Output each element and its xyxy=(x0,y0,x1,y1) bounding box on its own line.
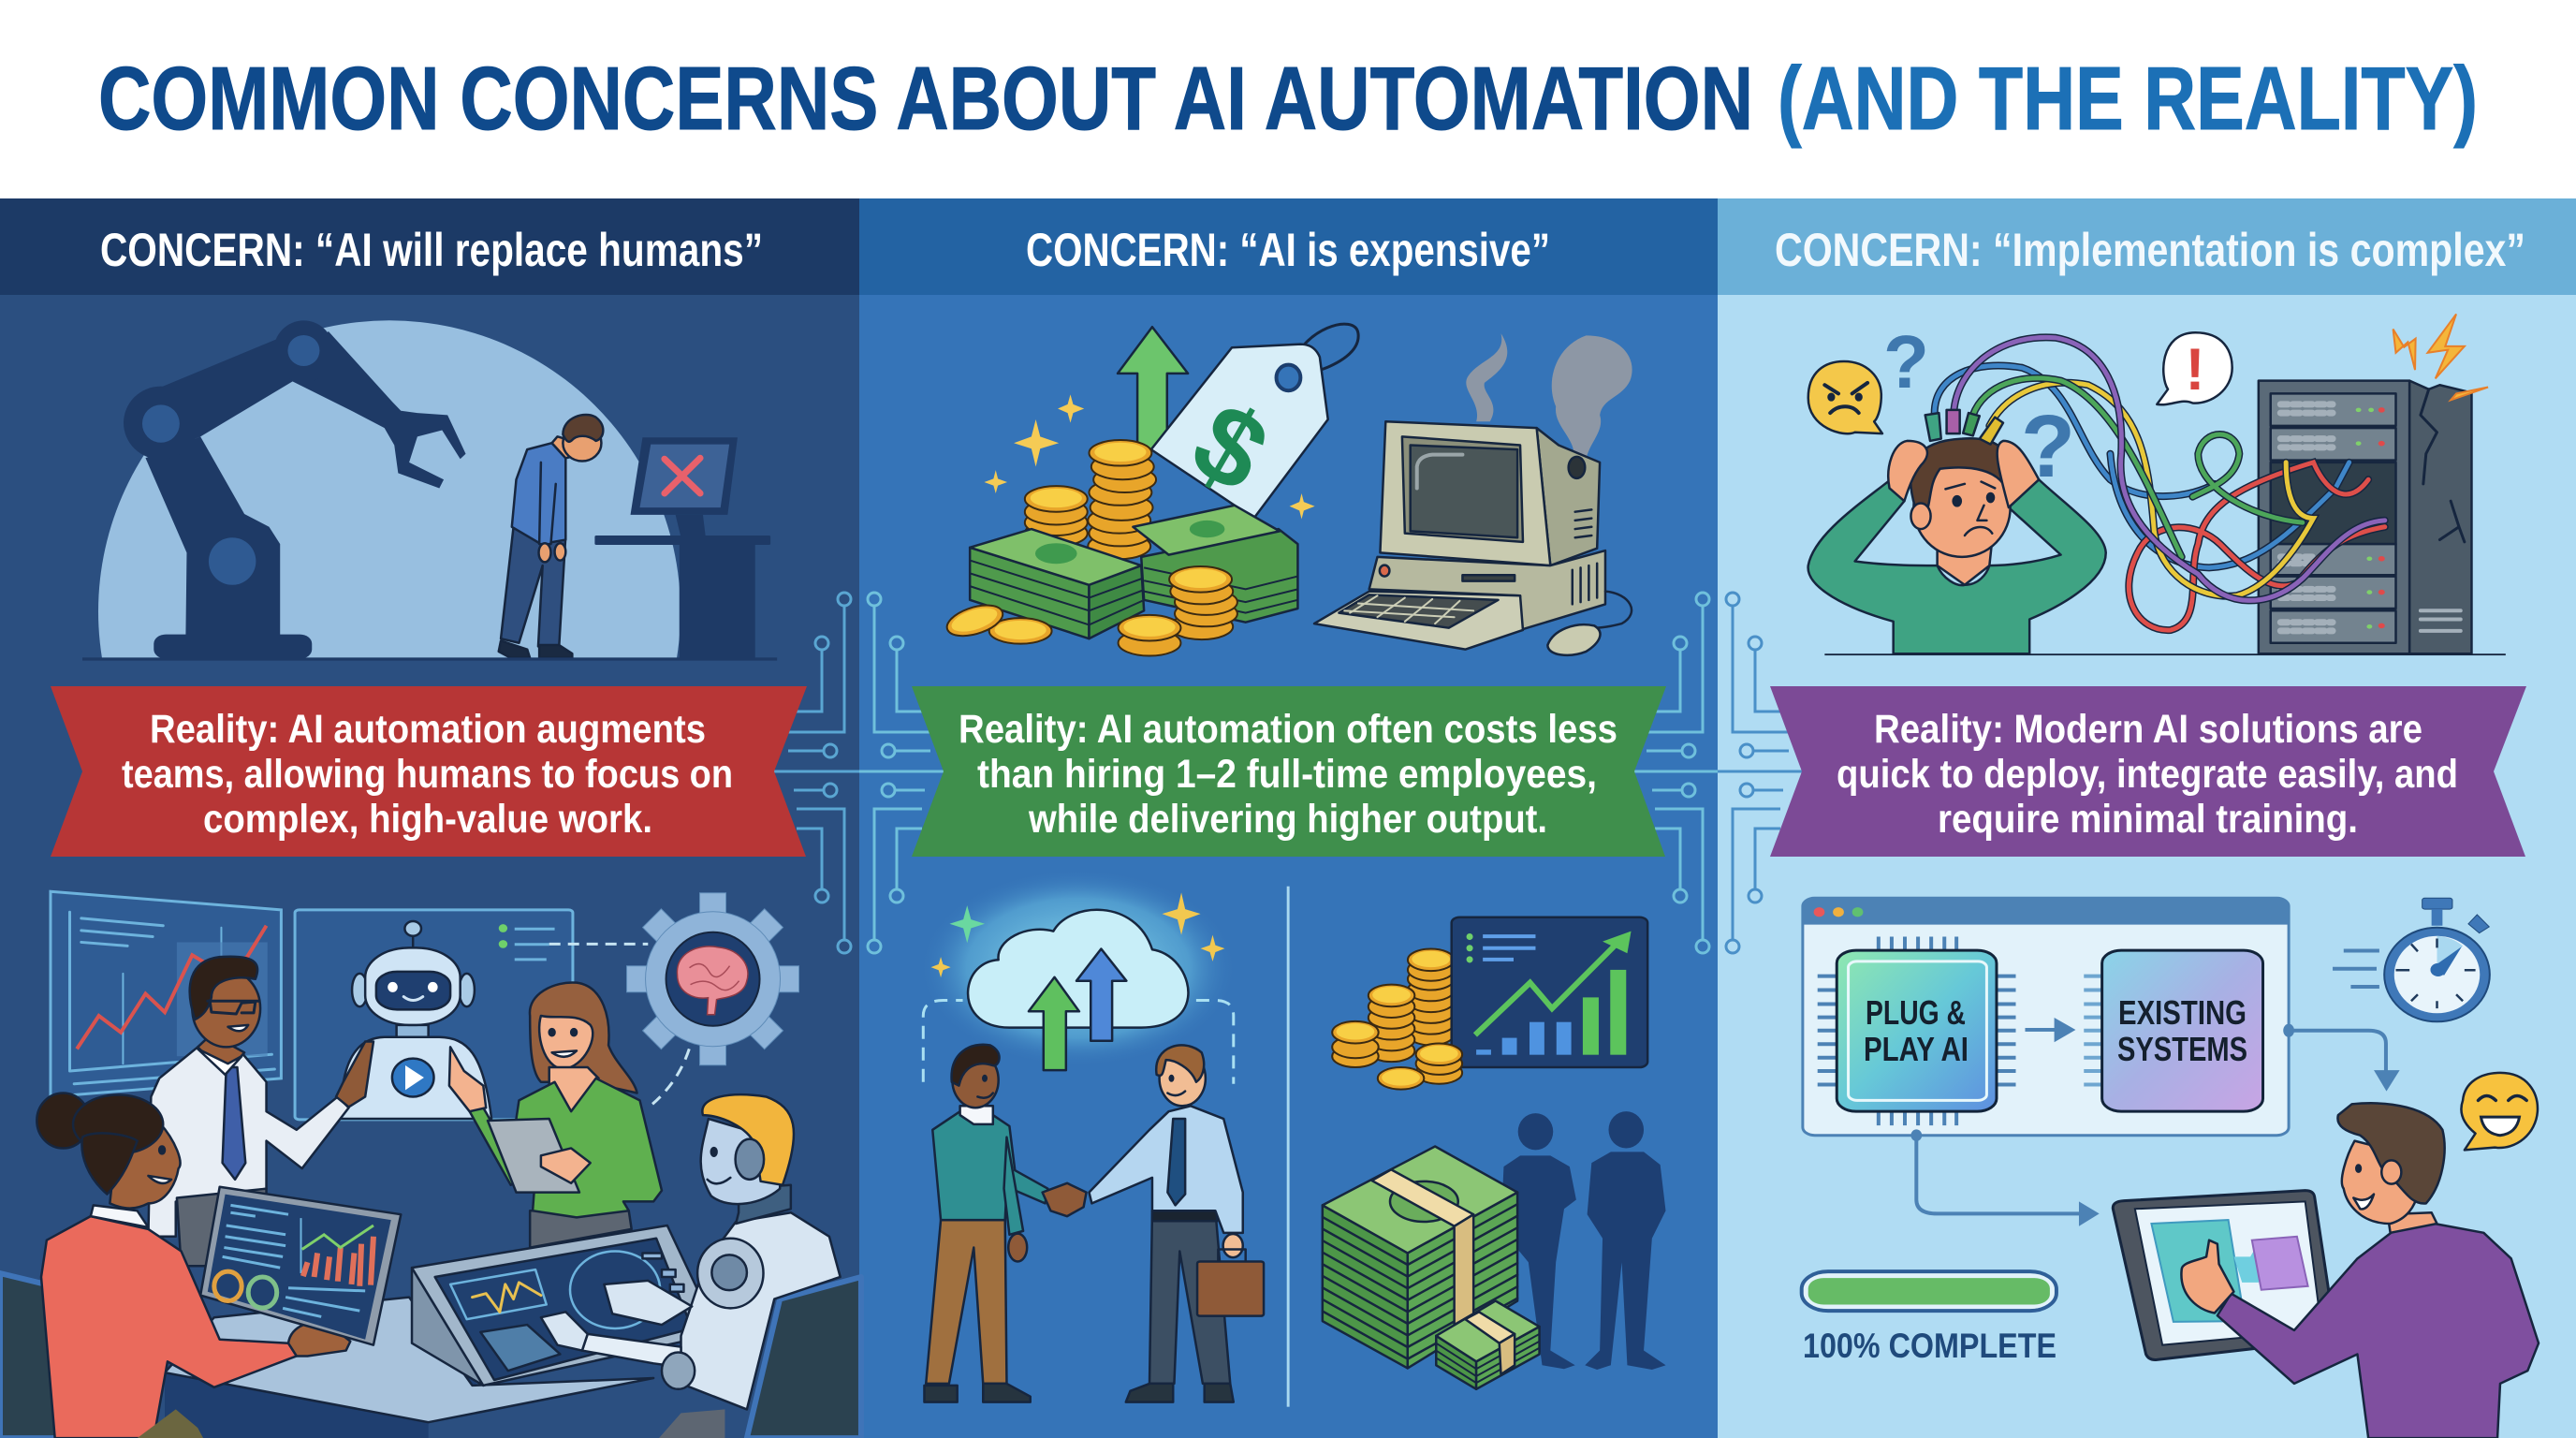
person: man in sweater xyxy=(924,1045,1047,1402)
illustration: robot arm and displaced worker xyxy=(82,320,777,661)
icon: sad worker xyxy=(499,415,603,658)
panel: column 1 background xyxy=(0,198,859,1438)
person: man with glasses xyxy=(148,957,373,1266)
icon: employee silhouettes xyxy=(1501,1111,1666,1370)
text: floating punctuation: ? xyxy=(1883,320,1929,404)
arrow: chip to systems xyxy=(2025,1018,2075,1042)
icon: tablet xyxy=(2113,1191,2335,1359)
laptop dashboard xyxy=(200,1187,401,1345)
arrow: window to tablet xyxy=(1910,1129,2100,1226)
browser window xyxy=(1803,898,2289,1136)
icon: angry face xyxy=(1808,361,1882,433)
icon: smoke xyxy=(1466,333,1632,462)
icon: lightning sparks xyxy=(2393,314,2488,400)
page background xyxy=(0,0,2576,198)
icon: tangled cables xyxy=(1935,337,2385,630)
arrow: window to person xyxy=(2283,1024,2400,1092)
illustration: humans and AI collaborating xyxy=(0,891,861,1438)
icon: robot assistant xyxy=(341,921,491,1119)
chip: existing systems xyxy=(2084,950,2263,1111)
heading band: concern 1 xyxy=(0,198,859,295)
person: woman at laptop xyxy=(0,1093,350,1438)
person: woman with tablet xyxy=(449,982,662,1248)
icon: robot arm xyxy=(124,320,466,659)
heading band: concern 2 xyxy=(859,198,1718,295)
illustration: rising cost and old computer xyxy=(941,324,1632,656)
icon: cloud with arrows xyxy=(968,910,1188,1070)
chip: plug and play AI xyxy=(1818,937,2016,1125)
panel: column 3 background xyxy=(1718,198,2576,1438)
text: chip labels: PLUG & xyxy=(1866,993,1966,1032)
table xyxy=(165,1298,653,1438)
text: floating punctuation: ! xyxy=(2186,337,2204,403)
icon: cash bundles xyxy=(1323,1146,1540,1389)
title: COMMON CONCERNS ABOUT AI AUTOMATION xyxy=(98,49,1753,149)
person: man with briefcase xyxy=(1043,1045,1264,1402)
text: floating punctuation: ? xyxy=(2021,397,2075,496)
divider xyxy=(1287,887,1290,1407)
heading band: concern 1: CONCERN: “AI will replace humans” xyxy=(100,224,763,276)
callout: reality 1 xyxy=(51,686,807,857)
icon: up arrow xyxy=(1118,327,1188,449)
callout: reality 2 xyxy=(912,686,1666,857)
icon: brain gear xyxy=(627,893,799,1065)
circuit traces between panels xyxy=(774,593,1803,953)
person: robot colleague xyxy=(541,1094,861,1438)
icon: stopwatch xyxy=(2333,898,2490,1021)
callout: reality 3 xyxy=(1770,686,2526,857)
robot screen xyxy=(295,910,689,1120)
icon: server rack xyxy=(2259,381,2471,653)
icon: cloud glow xyxy=(919,869,1237,1067)
icon: sparkles xyxy=(931,892,1224,977)
illustration: cloud deployment handshake xyxy=(919,869,1666,1407)
icon: sparkles xyxy=(984,394,1315,520)
illustration: tangled cables and failing server xyxy=(1808,314,2506,655)
callout: reality 3: require minimal training. xyxy=(1938,797,2358,842)
callout: reality 2: than hiring 1–2 full-time employees, xyxy=(977,752,1597,797)
callout: reality 1: teams, allowing humans to focus on xyxy=(122,752,733,797)
callout: reality 1: Reality: AI automation augments xyxy=(150,707,706,752)
progress bar xyxy=(1802,1271,2056,1311)
icon: old computer xyxy=(1314,421,1632,655)
control console xyxy=(412,1225,709,1386)
text: chip labels xyxy=(1864,993,2247,1068)
text: chip labels: SYSTEMS xyxy=(2117,1030,2247,1068)
icon: front coin stacks xyxy=(1332,1021,1462,1090)
icon: cable plugs xyxy=(1925,410,2003,445)
text: progress label: 100% COMPLETE xyxy=(1803,1327,2056,1365)
illustration: quick integration xyxy=(1802,898,2539,1438)
callout: reality 2: while delivering higher output. xyxy=(1028,797,1547,842)
heading band: concern 3 xyxy=(1718,198,2576,295)
icon: exclamation bubble xyxy=(2157,332,2232,404)
panel: column 2 background xyxy=(859,198,1718,1438)
chart screen xyxy=(51,891,281,1096)
icon: stressed person xyxy=(1808,438,2106,653)
connector dashes xyxy=(923,1001,1234,1084)
person: smiling user xyxy=(2181,1103,2539,1438)
callout: reality 2: Reality: AI automation often costs less xyxy=(959,707,1617,752)
icon: coin stacks xyxy=(1368,949,1454,1062)
icon: price tag xyxy=(1151,324,1358,519)
panel: growth dashboard xyxy=(1452,917,1647,1067)
heading band: concern 2: CONCERN: “AI is expensive” xyxy=(1026,224,1550,276)
text: chip labels: PLAY AI xyxy=(1864,1030,1969,1068)
text: dollar sign on tag: $ xyxy=(1173,378,1287,517)
text: floating punctuation xyxy=(1883,320,2204,496)
icon: coin stacks and cash xyxy=(941,440,1297,656)
callout: reality 3: Reality: Modern AI solutions are xyxy=(1874,707,2422,752)
callout: reality 3: quick to deploy, integrate easily, and xyxy=(1837,752,2458,797)
text: chip labels: EXISTING xyxy=(2118,993,2247,1032)
callout: reality 1: complex, high-value work. xyxy=(203,797,652,842)
table chairs shadow xyxy=(138,1409,724,1438)
icon: rejected computer on desk xyxy=(594,437,770,658)
icon: happy face xyxy=(2461,1073,2538,1150)
